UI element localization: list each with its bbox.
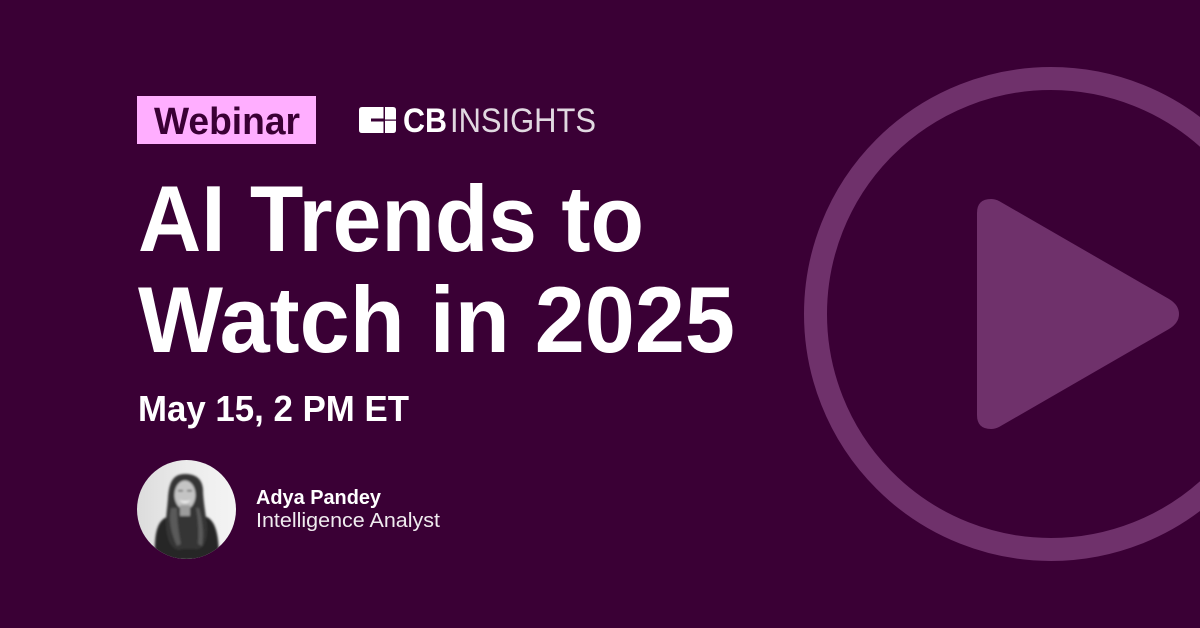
hair <box>166 474 207 550</box>
icon: play button <box>816 78 1200 550</box>
torso <box>155 516 219 560</box>
hair strands <box>170 508 181 546</box>
speaker name: Adya Pandey <box>256 487 382 509</box>
speaker portrait <box>137 460 237 560</box>
smile <box>179 500 191 503</box>
CB Insights logo <box>359 102 596 140</box>
speaker role: Intelligence Analyst <box>256 510 440 532</box>
logo mark <box>359 107 396 133</box>
webinar promo banner <box>137 67 1200 561</box>
neck and face <box>174 480 196 510</box>
webinar badge: Webinar <box>154 101 300 143</box>
logo wordmark bold part: CB <box>403 102 447 140</box>
logo wordmark light part: INSIGHTS <box>450 102 596 140</box>
title: Watch in 2025 <box>138 267 735 372</box>
title: AI Trends to <box>138 166 644 271</box>
title <box>138 166 735 372</box>
play ring <box>816 78 1200 550</box>
play triangle <box>977 199 1179 429</box>
event date: May 15, 2 PM ET <box>138 388 409 429</box>
